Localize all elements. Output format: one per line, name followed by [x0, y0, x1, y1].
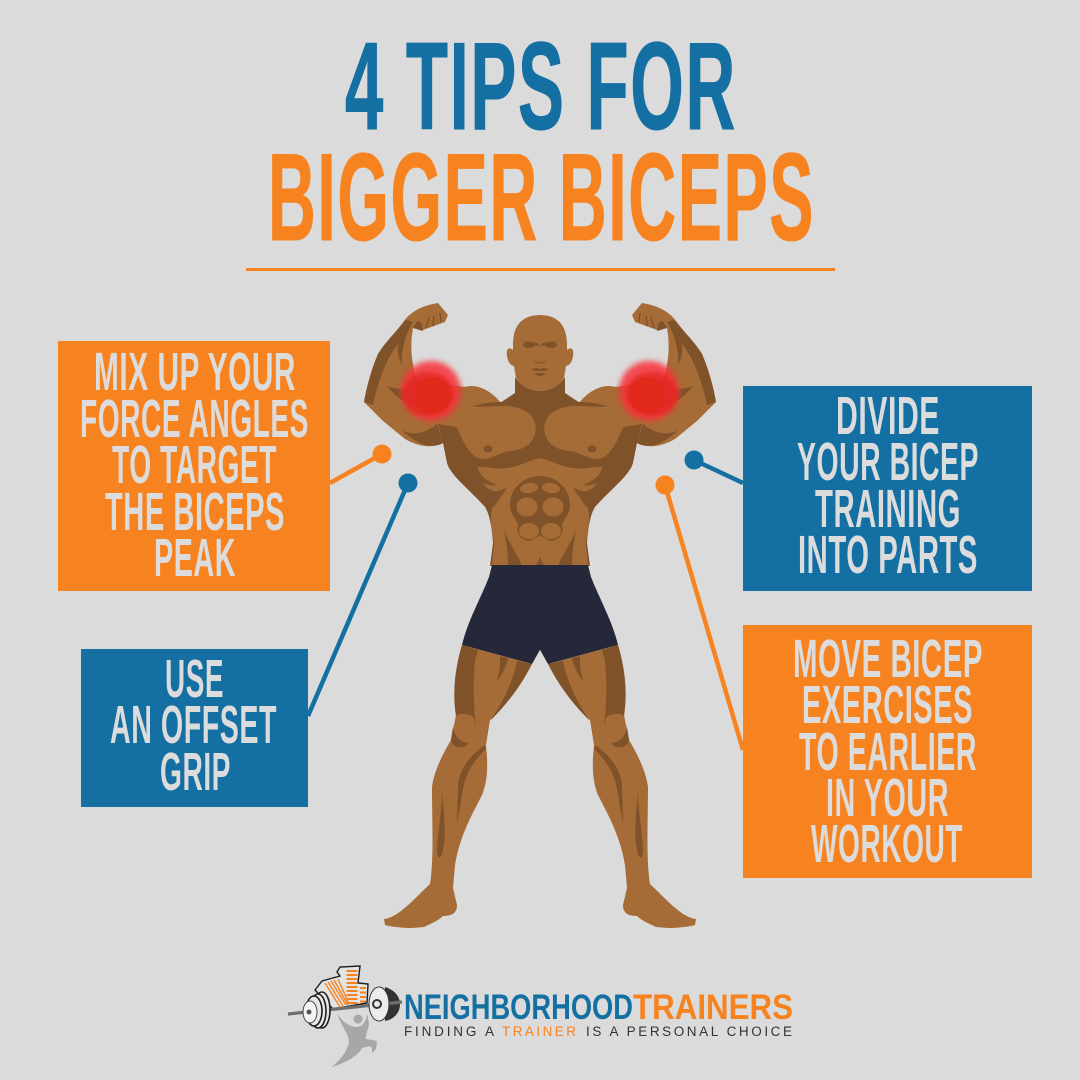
panel: offset grip [81, 649, 308, 807]
logo [288, 966, 793, 1067]
panel: mix up force angles: TO TARGET [112, 435, 277, 495]
panel: divide bicep training: DIVIDE [836, 386, 940, 446]
connector: offset grip [308, 474, 418, 716]
panel: mix up force angles: MIX UP YOUR [94, 342, 296, 402]
bicep highlight: right [619, 361, 679, 421]
tagline: FINDING A [404, 1024, 494, 1039]
connector: move exercises [656, 476, 743, 750]
title line 1: 4 TIPS FOR [345, 18, 737, 156]
tagline: TRAINER [502, 1024, 576, 1039]
panel: move bicep exercises: IN YOUR [826, 768, 949, 828]
tagline [404, 1024, 792, 1039]
bicep highlight: left [401, 361, 461, 421]
panel: divide bicep training [743, 386, 1032, 591]
panel: mix up force angles: THE BICEPS [105, 482, 285, 542]
connector: divide training [684, 450, 743, 483]
panel: offset grip: GRIP [160, 742, 231, 802]
tagline: IS A PERSONAL CHOICE [586, 1024, 792, 1039]
panel: offset grip: AN OFFSET [110, 695, 277, 755]
bodybuilder figure [364, 303, 716, 928]
panel: offset grip: USE [165, 649, 224, 709]
title [268, 18, 815, 267]
panel: divide bicep training: TRAINING [815, 479, 961, 539]
title underline [246, 268, 835, 271]
brand name: NEIGHBORHOOD [404, 988, 633, 1027]
panel: mix up force angles [58, 341, 330, 591]
connector: force angles [330, 444, 392, 483]
panel: mix up force angles: PEAK [154, 528, 236, 588]
panel: mix up force angles: FORCE ANGLES [80, 389, 309, 449]
brand name: TRAINERS [633, 988, 793, 1027]
panel: move bicep exercises [743, 625, 1032, 878]
icon: city and barbell [288, 966, 402, 1067]
